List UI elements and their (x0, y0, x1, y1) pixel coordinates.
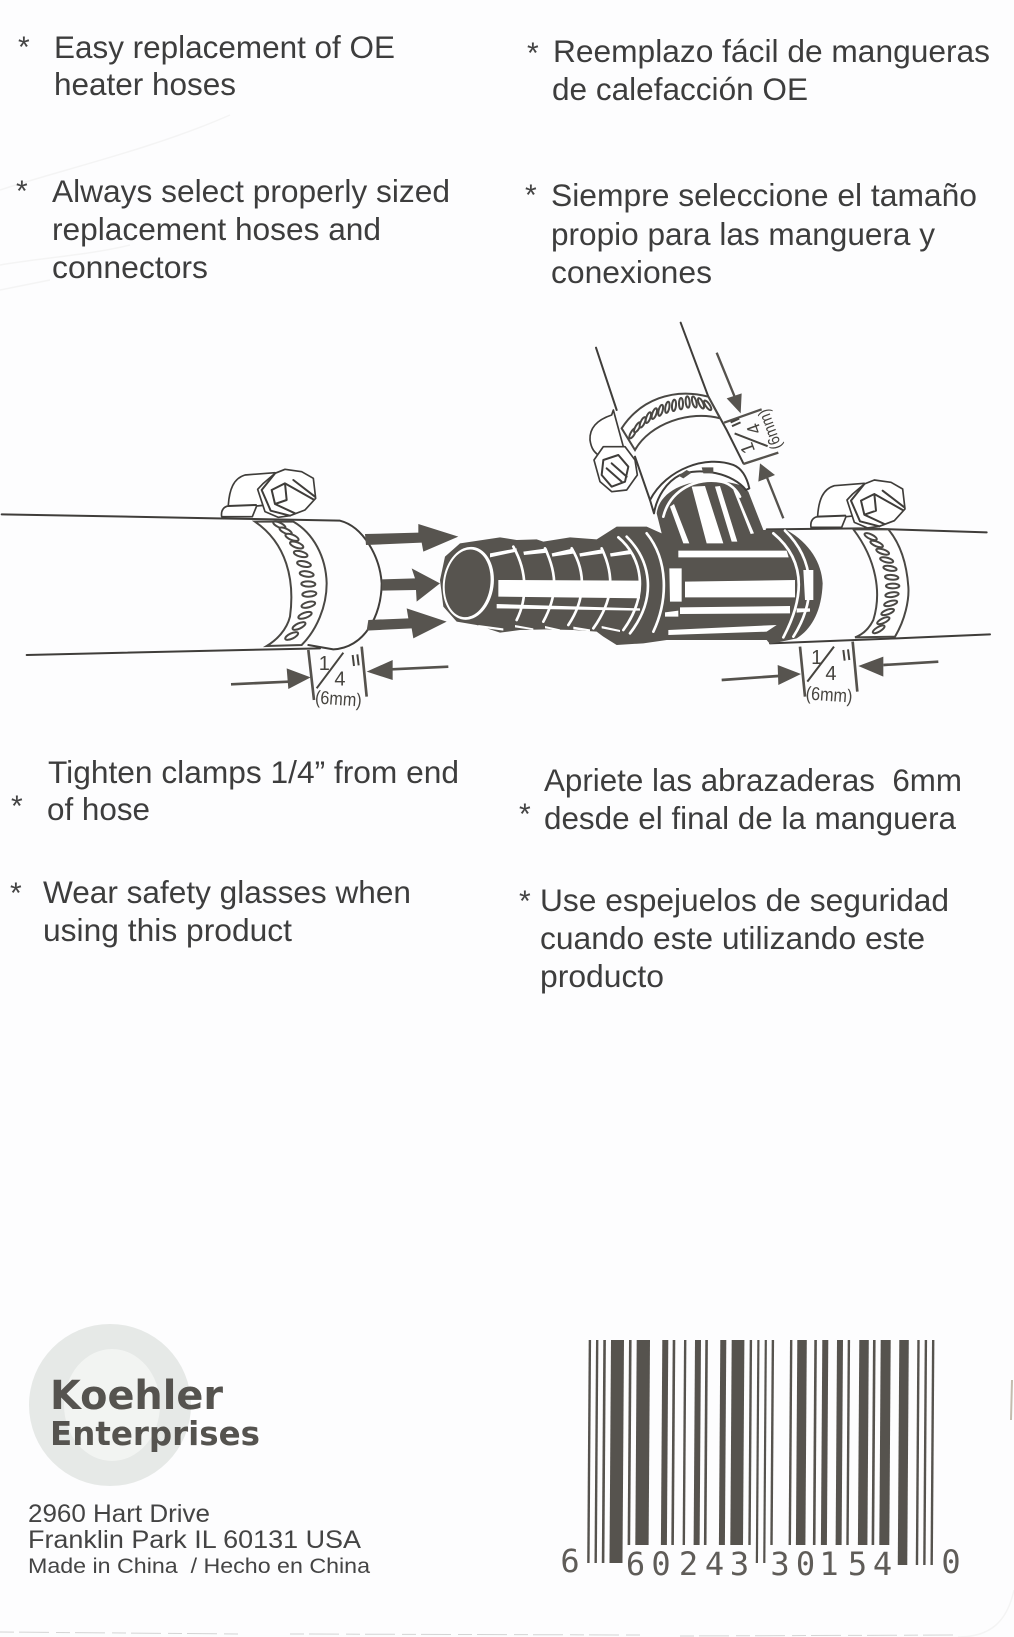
barcode: 0 (651, 1545, 671, 1583)
text block: English tighten clamps bullet: Tighten clamps 1/4” from end (48, 754, 459, 790)
right hose outline (767, 528, 990, 643)
branch hose clamp (622, 394, 720, 450)
text block: Spanish safety glasses bullet: cuando este utilizando este (540, 920, 925, 956)
text block: Spanish select size bullet: Siempre seleccione el tamaño (551, 177, 977, 213)
barcode: 4 (873, 1545, 892, 1583)
dimension: 1/4 inch, 6mm: 1 (319, 653, 330, 675)
text block: Spanish safety glasses bullet: producto (540, 958, 664, 994)
logo: Koehler Enterprises (29, 1324, 260, 1486)
dimension: 1/4 inch, 6mm (231, 647, 448, 711)
clamp band (255, 520, 327, 646)
text block: English select size bullet (16, 173, 450, 285)
barcode: 6 (560, 1542, 580, 1580)
branch clamp screw (590, 410, 637, 492)
text block: Spanish safety glasses bullet: Use espejuelos de seguridad (540, 882, 949, 918)
text block: Spanish select size bullet: conexiones (551, 254, 712, 290)
text block: English select size bullet: Always select properly sized (52, 173, 450, 209)
clamp screw (221, 469, 316, 517)
text block: English hose replacement bullet: * (18, 31, 30, 64)
text block: English select size bullet: replacement hoses and (52, 211, 381, 247)
dimension: branch 1/4 inch, 6mm (717, 353, 786, 518)
dimension: right 1/4 inch, 6mm: 4 (825, 663, 837, 685)
barcode: 0 (796, 1545, 815, 1583)
text block: Spanish safety glasses bullet (519, 882, 949, 994)
barcode: 1 (819, 1545, 839, 1583)
text block: Spanish tighten clamps bullet: desde el final de la manguera (544, 800, 956, 836)
barcode: 4 (705, 1545, 724, 1583)
tee highlights (665, 551, 813, 635)
right clamp screw (811, 480, 905, 528)
barb highlights (478, 548, 640, 632)
company address: 2960 Hart Drive (28, 1500, 210, 1528)
barcode: 0 (941, 1543, 961, 1581)
diagram: left hose with clamp and insertion arrows (2, 469, 458, 711)
text block: Spanish select size bullet (525, 177, 977, 290)
barcode: 3 (770, 1545, 790, 1583)
text block: English tighten clamps bullet (11, 754, 459, 827)
text block: Spanish select size bullet: * (525, 179, 537, 212)
dimension: 1/4 inch, 6mm: 4 (334, 669, 346, 691)
barb ridges (513, 547, 610, 628)
text block: Spanish tighten clamps bullet: Apriete las abrazaderas 6mm (544, 762, 962, 798)
text block: Spanish select size bullet: propio para las manguera y (551, 216, 935, 252)
text block: Spanish hose replacement bullet (527, 33, 990, 107)
text block: English tighten clamps bullet: of hose (47, 791, 150, 827)
text block: English select size bullet: connectors (52, 249, 208, 285)
hose outline (2, 514, 382, 655)
dimension: branch 1/4 inch, 6mm: 4 (742, 420, 765, 437)
upper hose outline (596, 323, 743, 500)
dimension: branch 1/4 inch, 6mm: (6mm) (754, 407, 786, 452)
diagram: T fitting with branch hose and right hose (438, 323, 990, 707)
company address: Made in China / Hecho en China (28, 1555, 370, 1578)
barcode: 3 (730, 1545, 749, 1583)
text block: English select size bullet: * (16, 175, 28, 208)
text block: English safety glasses bullet: * (10, 877, 22, 910)
text block: English hose replacement bullet: heater hoses (54, 66, 236, 102)
text block: Spanish tighten clamps bullet: * (519, 798, 531, 831)
text block: English hose replacement bullet (18, 29, 395, 102)
fitting open end (438, 543, 499, 623)
text block: Spanish hose replacement bullet: Reemplazo fácil de mangueras (553, 33, 990, 69)
branch collar and stripes (670, 486, 754, 543)
barcode: 6 (626, 1545, 645, 1583)
company address (28, 1500, 370, 1578)
arrows into fitting (365, 524, 458, 638)
text block: Spanish safety glasses bullet: * (519, 885, 531, 918)
text block: Spanish tighten clamps bullet (519, 762, 962, 836)
logo: Koehler Enterprises: Koehler (50, 1373, 223, 1419)
text block: English tighten clamps bullet: * (11, 790, 23, 823)
company address: Franklin Park IL 60131 USA (28, 1526, 361, 1554)
logo: Koehler Enterprises: Enterprises (50, 1414, 260, 1453)
text block: Spanish hose replacement bullet: de calefacción OE (552, 71, 808, 107)
barcode: 2 (679, 1545, 698, 1583)
dimension: right 1/4 inch, 6mm: 1 (811, 647, 822, 669)
text block: Spanish hose replacement bullet: * (527, 37, 539, 70)
text block: English safety glasses bullet (10, 874, 411, 948)
dimension: right 1/4 inch, 6mm: (6mm) (805, 682, 853, 707)
fitting body (440, 462, 823, 645)
dimension: branch 1/4 inch, 6mm: 1 (736, 440, 759, 457)
text block: English safety glasses bullet: using this product (43, 912, 292, 948)
right hose clamp (853, 529, 908, 637)
dimension: right 1/4 inch, 6mm (722, 642, 938, 707)
barcode: 5 (848, 1545, 867, 1583)
barcode (560, 1340, 961, 1583)
text block: English hose replacement bullet: Easy replacement of OE (54, 29, 395, 65)
text block: English safety glasses bullet: Wear safety glasses when (43, 874, 411, 910)
dimension: 1/4 inch, 6mm: (6mm) (314, 686, 362, 711)
